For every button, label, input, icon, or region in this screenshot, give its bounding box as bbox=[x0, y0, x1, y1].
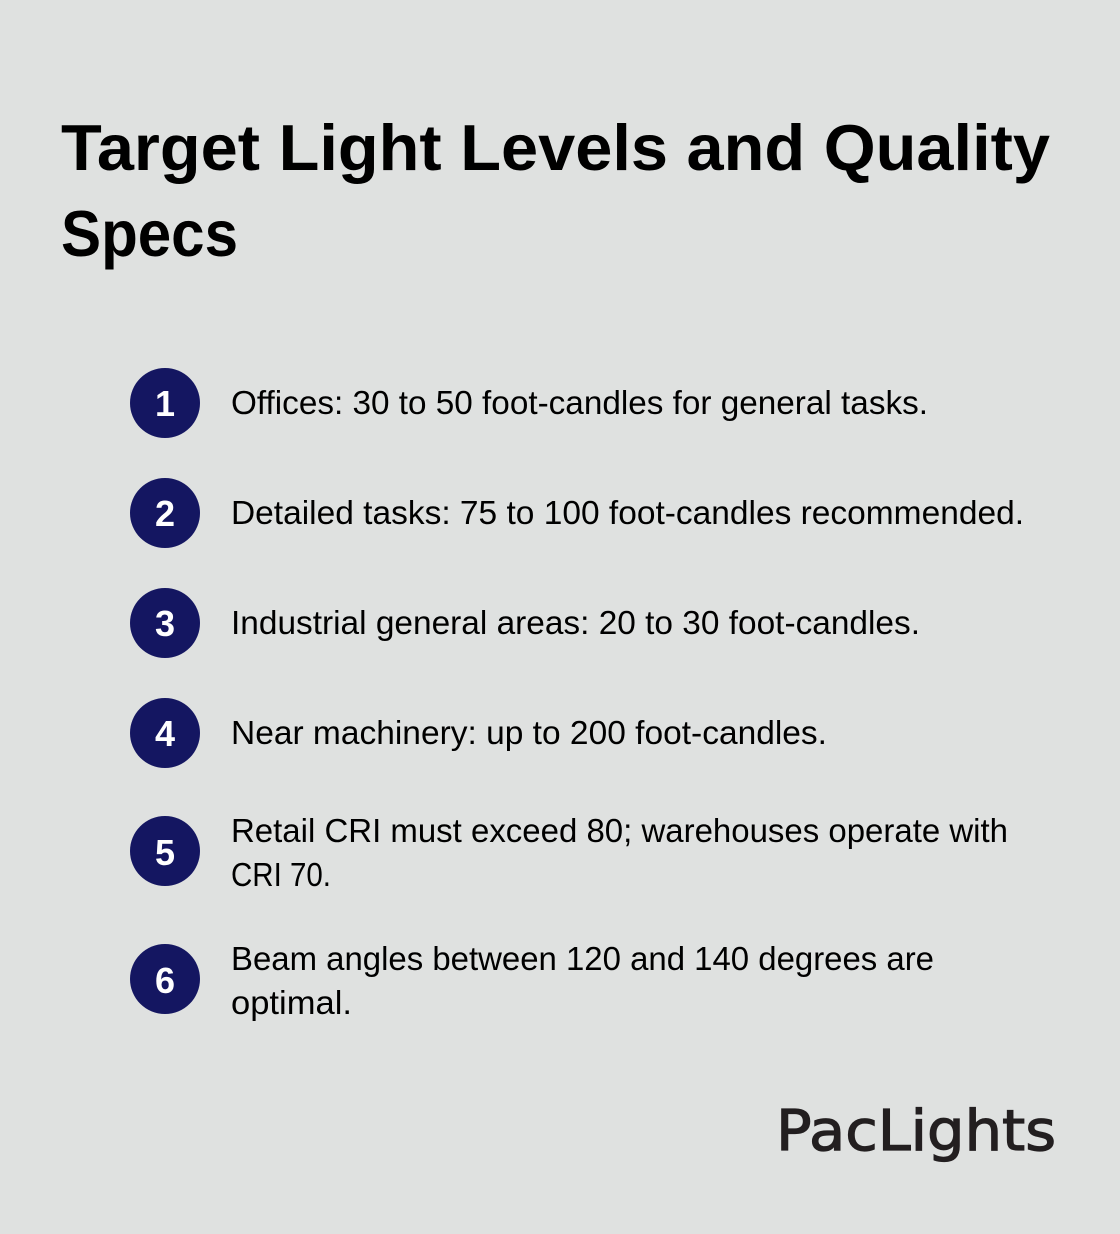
item 4: near machinery bbox=[130, 698, 827, 768]
item 4: near machinery: Near machinery: up to 200 foot-candles. bbox=[231, 714, 827, 751]
item 4: near machinery: 4 bbox=[155, 713, 175, 754]
title: Specs bbox=[61, 197, 238, 270]
item 1: offices: Offices: 30 to 50 foot-candles for general tasks. bbox=[231, 384, 928, 421]
item 5: CRI: 5 bbox=[155, 832, 175, 873]
list of specs bbox=[130, 368, 1024, 1021]
title bbox=[61, 111, 1050, 270]
item 1: offices bbox=[130, 368, 928, 438]
item 5: CRI: CRI 70. bbox=[231, 856, 331, 893]
item 1: offices: 1 bbox=[155, 383, 175, 424]
item 2: detailed tasks: 2 bbox=[155, 493, 175, 534]
item 6: beam angles: Beam angles between 120 and 140 degrees are bbox=[231, 940, 934, 977]
item 6: beam angles: 6 bbox=[155, 960, 175, 1001]
logo: PacLights: PacLights bbox=[776, 1099, 1056, 1164]
item 3: industrial areas: Industrial general areas: 20 to 30 foot-candles. bbox=[231, 604, 920, 641]
item 3: industrial areas: 3 bbox=[155, 603, 175, 644]
item 2: detailed tasks bbox=[130, 478, 1024, 548]
item 2: detailed tasks: Detailed tasks: 75 to 100 foot-candles recommended. bbox=[231, 494, 1024, 531]
item 6: beam angles bbox=[130, 940, 934, 1021]
item 3: industrial areas bbox=[130, 588, 920, 658]
item 6: beam angles: optimal. bbox=[231, 984, 352, 1021]
title: Target Light Levels and Quality bbox=[61, 111, 1050, 184]
item 5: CRI bbox=[130, 812, 1008, 893]
item 5: CRI: Retail CRI must exceed 80; warehouses operate with bbox=[231, 812, 1008, 849]
